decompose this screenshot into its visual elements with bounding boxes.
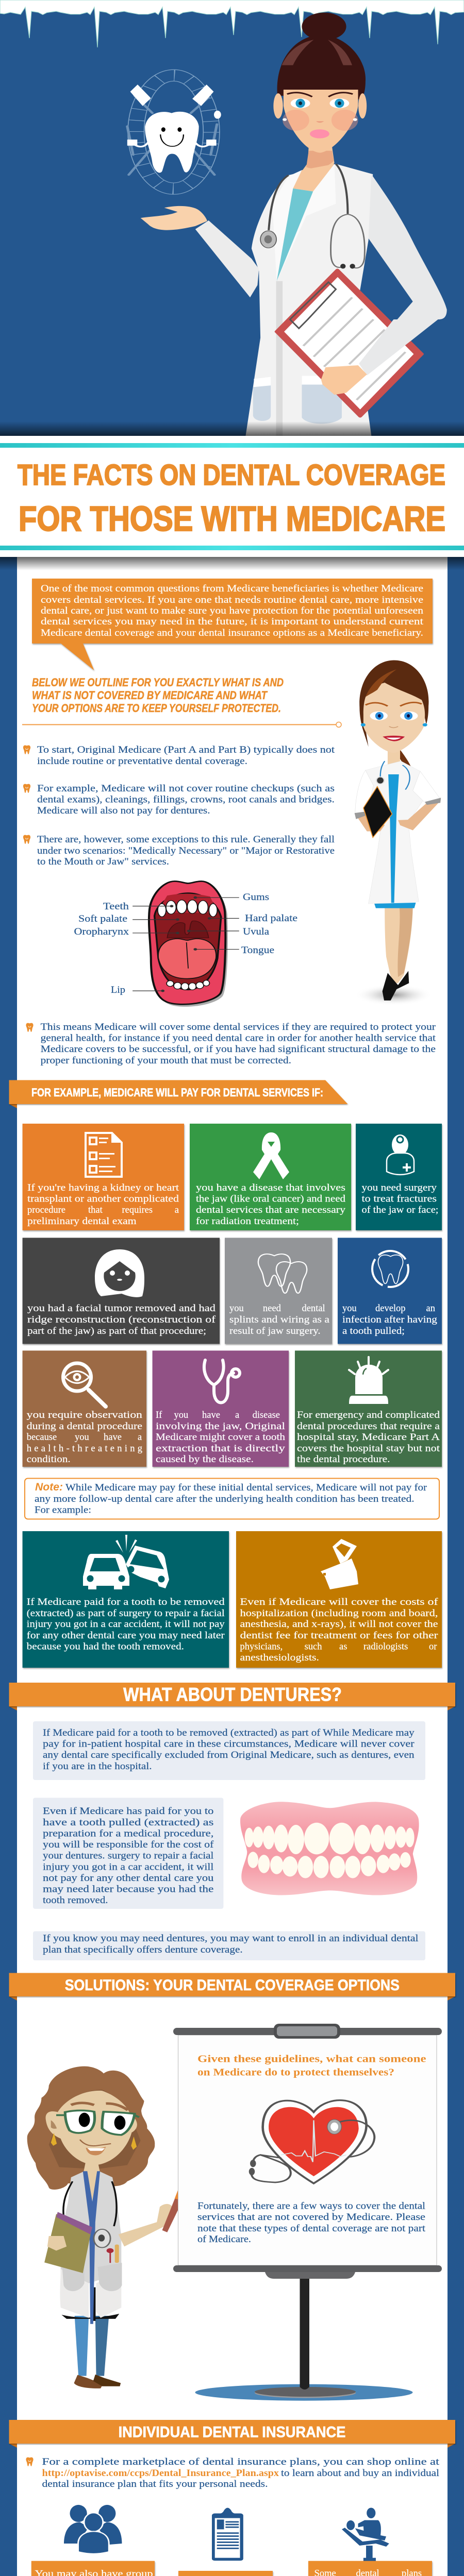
card: observation during procedure: you require observation bbox=[27, 1410, 142, 1420]
card: infection after tooth pulled: you bbox=[342, 1303, 357, 1314]
card: tooth extraction: caused by the disease. bbox=[156, 1454, 254, 1465]
whiteboard heading bbox=[197, 2054, 426, 2078]
card: infection after tooth pulled: a tooth pulled; bbox=[342, 1326, 405, 1336]
bullet text: marketplace: to learn about and buy an individual bbox=[281, 2468, 439, 2479]
text panel: cost of dentures: may need later because you had the bbox=[43, 1885, 213, 1895]
icon: tooth bullet bbox=[23, 835, 30, 844]
card: observation during procedure: condition. bbox=[27, 1454, 71, 1465]
text panel: in-patient care: if you are in the hospital. bbox=[43, 1761, 152, 1772]
icon: tooth with arrows bbox=[372, 1251, 408, 1287]
illustration: nurse with tablet bbox=[355, 660, 441, 1006]
note box bbox=[25, 1479, 439, 1519]
card: hospitalization example: such bbox=[305, 1642, 322, 1652]
ribbon heading: individual dental insurance bbox=[9, 2420, 455, 2448]
card: emergency hospital stay: covers the hospital stay but not bbox=[297, 1444, 440, 1454]
anatomy diagram: open mouth: Hard palate bbox=[245, 913, 297, 924]
card: hospitalization example: or bbox=[429, 1642, 437, 1652]
whiteboard surface bbox=[178, 2035, 437, 2265]
panel: white content column bbox=[17, 557, 448, 2576]
callout: group dental insurance bbox=[31, 2561, 155, 2576]
bullet text: not covered: For example, Medicare will not cover routine checkups (such as bbox=[37, 784, 335, 794]
card: observation during procedure: have bbox=[104, 1432, 122, 1443]
icon: car crash bbox=[83, 1535, 169, 1589]
bullet text: Original Medicare: To start, Original Medicare (Part A and Part B) typically does not bbox=[37, 745, 335, 755]
ribbon heading: solutions: SOLUTIONS: YOUR DENTAL COVERAGE OPTIONS bbox=[65, 1977, 400, 1994]
whiteboard bbox=[173, 2024, 442, 2401]
subheading: what is covered: WHAT IS NOT COVERED BY MEDICARE AND WHAT bbox=[32, 689, 268, 702]
card: observation during procedure: because bbox=[27, 1432, 57, 1443]
illustration: tooth with dental tools bbox=[127, 70, 221, 194]
card: disease involving the jaw bbox=[190, 1124, 351, 1230]
note box: Note: bbox=[35, 1481, 63, 1493]
header: blue hero with doctor and tooth bbox=[0, 0, 464, 436]
card: surgery for fractures: to treat fractures bbox=[362, 1194, 437, 1205]
whiteboard heading: on Medicare do to protect themselves? bbox=[197, 2066, 394, 2078]
card: hospitalization example: anesthesia, and x-rays), it will not cover the bbox=[240, 1619, 438, 1630]
card: tooth extraction: extraction that is directly bbox=[156, 1444, 286, 1454]
card: hospitalization example: physicians, bbox=[240, 1642, 283, 1652]
icon: magnifier with eye bbox=[63, 1363, 106, 1406]
card: dental splints: result of jaw surgery. bbox=[229, 1326, 321, 1336]
card: surgery for fractures bbox=[356, 1124, 442, 1230]
text panel: cost of dentures: preparation for a medical procedure, bbox=[43, 1829, 213, 1839]
icon: surgeon bbox=[387, 1134, 414, 1175]
card: observation during procedure: during a dental procedure bbox=[27, 1421, 142, 1432]
card: hospitalization example: dentist fee for treatment or fees for other bbox=[240, 1631, 438, 1641]
bullet text: what Medicare covers: This means Medicare will cover some dental services if they are required to protect your bbox=[41, 1022, 436, 1032]
text panel: individual plan: plan that specifically offers denture coverage. bbox=[43, 1945, 243, 1955]
whiteboard body text: note that these types of dental coverage are not part bbox=[197, 2224, 426, 2234]
text panel: individual plan bbox=[33, 1931, 425, 1960]
whiteboard body text: of Medicare. bbox=[197, 2234, 251, 2245]
icon: checklist bbox=[85, 1132, 123, 1178]
card: hospitalization example: Even if Medicare will cover the costs of bbox=[240, 1597, 439, 1607]
illustration: dentures bbox=[240, 1802, 419, 1895]
text panel: individual plan: If you know you may need dentures, you may want to enroll in an individual dental bbox=[43, 1934, 419, 1944]
card: disease involving the jaw: for radiation treatment; bbox=[196, 1216, 299, 1227]
bullet text: marketplace: http://optavise.com/ccps/Dental_Insurance_Plan.aspx bbox=[42, 2468, 279, 2479]
bullet text: exceptions: There are, however, some exceptions to this rule. Generally they fall bbox=[37, 835, 335, 845]
icon: tooth bullet bbox=[26, 1023, 34, 1032]
card: disease involving the jaw: dental services that are necessary bbox=[196, 1205, 346, 1215]
card: kidney or heart transplant: If you're having a kidney or heart bbox=[27, 1183, 179, 1193]
text panel: cost of dentures bbox=[33, 1798, 223, 1909]
card: hospitalization example: radiologists bbox=[363, 1642, 408, 1652]
bullet text: what Medicare covers: Medicare covers to be successful, or if you have had significant structural damage to the bbox=[41, 1044, 436, 1055]
bullet text: not covered bbox=[23, 784, 335, 816]
text panel: cost of dentures: your dentures. surgery to repair a facial bbox=[43, 1851, 213, 1861]
icon: tooth bullet bbox=[23, 784, 30, 793]
anatomy diagram: open mouth: Soft palate bbox=[78, 914, 127, 924]
card: hospitalization example: as bbox=[339, 1642, 347, 1652]
anatomy diagram: open mouth: Oropharynx bbox=[74, 927, 129, 937]
text panel: in-patient care: pay for in-patient hospital care in these circumstances, Medicare will never cover bbox=[43, 1739, 415, 1750]
bullet text: marketplace bbox=[26, 2457, 440, 2489]
card: kidney or heart transplant: preliminary dental exam bbox=[27, 1216, 137, 1227]
illustration: mouth bbox=[132, 882, 239, 1007]
card: dental splints: splints and wiring as a bbox=[229, 1315, 329, 1325]
text panel: cost of dentures: not pay for any other dental care you bbox=[43, 1873, 213, 1884]
ECG top edge bbox=[0, 0, 464, 47]
bullet text: marketplace: For a complete marketplace of dental insurance plans, you can shop online at bbox=[42, 2457, 440, 2467]
bullet text: not covered: dental exams), cleanings, fillings, crowns, root canals and bridges. bbox=[37, 794, 335, 805]
card: hospitalization example: hospitalization (including room and board, bbox=[240, 1608, 438, 1619]
callout: intro speech box bbox=[32, 579, 433, 670]
card: infection after tooth pulled: an bbox=[426, 1303, 435, 1314]
card: emergency hospital stay: For emergency and complicated bbox=[297, 1410, 440, 1420]
whiteboard stand bbox=[173, 2024, 442, 2401]
card: tooth extraction: you bbox=[174, 1410, 188, 1420]
card: emergency hospital stay: hospital stay, Medicare Part A bbox=[297, 1432, 440, 1443]
card: dental splints bbox=[225, 1238, 332, 1344]
text panel: cost of dentures: injury you got in a car accident, it will bbox=[43, 1862, 213, 1872]
text panel: cost of dentures: tooth removed. bbox=[43, 1895, 108, 1906]
icon: tooth bullet bbox=[26, 2458, 34, 2466]
card: emergency hospital stay: the dental procedure. bbox=[297, 1454, 390, 1465]
card: car accident example: (extracted) as part of surgery to repair a facial bbox=[27, 1608, 225, 1619]
bullet text: exceptions: to the Mouth or Jaw" services. bbox=[37, 857, 169, 867]
text panel: cost of dentures: Even if Medicare has paid for you to bbox=[43, 1806, 213, 1817]
subheading: what is covered: YOUR OPTIONS ARE TO KEEP YOURSELF PROTECTED. bbox=[32, 702, 281, 715]
note box: any more follow-up dental care after the underlying health condition has been treated. bbox=[35, 1494, 415, 1504]
illustration: heart with stethoscope bbox=[249, 2100, 374, 2183]
card: tooth extraction: Medicare might cover a tooth bbox=[156, 1432, 285, 1443]
card: observation during procedure: a bbox=[138, 1432, 142, 1443]
card: tooth extraction bbox=[153, 1351, 289, 1467]
card: kidney or heart transplant bbox=[23, 1124, 184, 1230]
icon: group of people bbox=[64, 2505, 122, 2554]
icon: siren bbox=[349, 1357, 388, 1404]
card: disease involving the jaw: you have a disease that involves bbox=[196, 1183, 345, 1193]
card: car accident example: because you had the tooth removed. bbox=[27, 1642, 184, 1652]
text panel: in-patient care bbox=[33, 1721, 425, 1780]
card: infection after tooth pulled: develop bbox=[375, 1303, 406, 1314]
card: kidney or heart transplant: that bbox=[88, 1205, 103, 1215]
bullet text: exceptions bbox=[23, 835, 335, 867]
card: dental splints: need bbox=[263, 1303, 281, 1314]
card: emergency hospital stay bbox=[295, 1351, 442, 1467]
icon: awareness ribbon bbox=[253, 1132, 289, 1179]
callout: intro speech box: dental care, or just want to make sure you have protection for the potential unforeseen bbox=[41, 606, 423, 616]
card: facial tumor: part of the jaw) as part of that procedure; bbox=[27, 1326, 206, 1336]
illustration: doctor holding clipboard bbox=[141, 13, 447, 436]
subheading: what is covered bbox=[22, 676, 341, 727]
card: observation during procedure bbox=[23, 1351, 146, 1467]
card: car accident example: for any other dental care you may need later bbox=[27, 1631, 225, 1641]
card: disease involving the jaw: the jaw (like oral cancer) and need bbox=[196, 1194, 346, 1205]
card: kidney or heart transplant: transplant or another complicated bbox=[27, 1194, 179, 1205]
whiteboard heading: Given these guidelines, what can someone bbox=[197, 2054, 426, 2065]
bullet text: not covered: Medicare will also not pay for dentures. bbox=[37, 806, 210, 816]
card: tooth extraction: have bbox=[202, 1410, 220, 1420]
card: tooth extraction: a bbox=[235, 1410, 239, 1420]
icon: woman face bbox=[95, 1249, 144, 1297]
card: tooth extraction: involving the jaw, Original bbox=[156, 1421, 285, 1432]
note box: For example: bbox=[35, 1505, 91, 1516]
anatomy diagram: open mouth: Uvula bbox=[243, 927, 269, 937]
card: kidney or heart transplant: procedure bbox=[27, 1205, 65, 1215]
bullet text: what Medicare covers: general health, for instance if you need dental care in order for another health service that bbox=[41, 1033, 436, 1044]
icon: hand with money bbox=[321, 1539, 358, 1589]
bullet text: Original Medicare: include routine or preventative dental coverage. bbox=[37, 756, 247, 767]
anatomy diagram: open mouth: Teeth bbox=[103, 902, 129, 912]
card: observation during procedure: health-threatening bbox=[27, 1444, 142, 1454]
ribbon heading: for example: FOR EXAMPLE, MEDICARE WILL PAY FOR DENTAL SERVICES IF: bbox=[31, 1086, 323, 1099]
anatomy diagram: open mouth bbox=[74, 882, 297, 1007]
icon: stethoscope bbox=[204, 1360, 240, 1402]
ribbon heading: what about dentures bbox=[9, 1683, 455, 1710]
callout: read carefully bbox=[178, 2571, 273, 2576]
card: observation during procedure: you bbox=[75, 1432, 89, 1443]
bullet text: marketplace: dental insurance plan that fits your personal needs. bbox=[42, 2479, 268, 2489]
callout: provider network bbox=[308, 2561, 432, 2576]
text panel: cost of dentures: you will be responsible for the cost of bbox=[43, 1840, 214, 1850]
bullet text: what Medicare covers: proper functioning of your mouth that must be corrected. bbox=[41, 1056, 291, 1066]
card: emergency hospital stay: dental procedures that require a bbox=[297, 1421, 440, 1432]
bullet text: what Medicare covers bbox=[26, 1022, 436, 1066]
subheading: what is covered: BELOW WE OUTLINE FOR YOU EXACTLY WHAT IS AND bbox=[32, 676, 284, 689]
card: hospitalization example: anesthesiologists. bbox=[240, 1653, 319, 1663]
text panel: in-patient care: any dental care specifically excluded from Original Medicare, such as dentures, even bbox=[43, 1750, 415, 1760]
whiteboard body text bbox=[197, 2201, 426, 2245]
card: car accident example: injury you got in a car accident, it will not pay bbox=[27, 1619, 225, 1630]
callout: intro speech box: Medicare dental coverage and your dental insurance options as a Medicare beneficiary. bbox=[41, 628, 423, 638]
bullet text: exceptions: under two scenarios: "Medically Necessary" or "Major or Restorative bbox=[37, 846, 335, 856]
text panel: cost of dentures: have a tooth pulled (extracted) as bbox=[43, 1818, 213, 1828]
card: tooth extraction: disease bbox=[253, 1410, 280, 1420]
card: surgery for fractures: you need surgery bbox=[362, 1183, 437, 1193]
callout: intro speech box: One of the most common questions from Medicare beneficiaries is whether Medicare bbox=[41, 584, 423, 594]
ribbon heading: for example bbox=[9, 1080, 347, 1108]
icon: dental chair bbox=[342, 2507, 389, 2562]
card: facial tumor: you had a facial tumor removed and had bbox=[27, 1303, 216, 1314]
anatomy diagram: open mouth: Tongue bbox=[241, 945, 274, 956]
icon: tooth bullet bbox=[23, 745, 30, 754]
header bottom shade bbox=[0, 421, 464, 436]
note box: While Medicare may pay for these initial dental services, Medicare will not pay for bbox=[65, 1483, 427, 1493]
bullet text: Original Medicare bbox=[23, 745, 335, 767]
anatomy diagram: open mouth: Gums bbox=[243, 892, 269, 903]
card: car accident example bbox=[23, 1531, 229, 1668]
callout: intro speech box: dental services you may need in the future, it is important to understand current bbox=[41, 617, 424, 627]
ribbon heading: solutions bbox=[9, 1973, 455, 2001]
card: car accident example: If Medicare paid for a tooth to be removed bbox=[27, 1597, 225, 1607]
text panel: in-patient care: If Medicare paid for a tooth to be removed (extracted) as part of While Medicare may bbox=[43, 1728, 415, 1738]
whiteboard body text: Fortunately, there are a few ways to cover the dental bbox=[197, 2201, 425, 2211]
card: surgery for fractures: of the jaw or face; bbox=[362, 1205, 438, 1215]
card: infection after tooth pulled: infection after having bbox=[342, 1315, 437, 1325]
icon: clipboard bbox=[212, 2508, 243, 2561]
icon: two teeth bbox=[258, 1254, 307, 1293]
illustration: female doctor with glasses bbox=[27, 2066, 187, 2388]
card: infection after tooth pulled bbox=[338, 1238, 442, 1344]
ribbon heading: individual dental insurance: INDIVIDUAL DENTAL INSURANCE bbox=[119, 2424, 345, 2441]
card: hospitalization example bbox=[236, 1531, 442, 1668]
card: dental splints: you bbox=[229, 1303, 244, 1314]
card: tooth extraction: If bbox=[156, 1410, 162, 1420]
card: dental splints: dental bbox=[302, 1303, 325, 1314]
card: facial tumor: ridge reconstruction (reconstruction of bbox=[27, 1315, 216, 1325]
card: kidney or heart transplant: requires bbox=[122, 1205, 153, 1215]
ribbon heading: what about dentures: WHAT ABOUT DENTURES? bbox=[123, 1684, 342, 1705]
card: facial tumor bbox=[23, 1238, 220, 1344]
title banner bbox=[0, 436, 464, 557]
callout: intro speech box: covers dental services. If you are one that needs routine dental care, more intensive bbox=[41, 595, 423, 605]
anatomy diagram: open mouth: Lip bbox=[111, 985, 125, 995]
whiteboard body text: services that are not covered by Medicare. Please bbox=[197, 2212, 425, 2223]
card: kidney or heart transplant: a bbox=[175, 1205, 179, 1215]
panel shadow under banner bbox=[0, 557, 464, 570]
